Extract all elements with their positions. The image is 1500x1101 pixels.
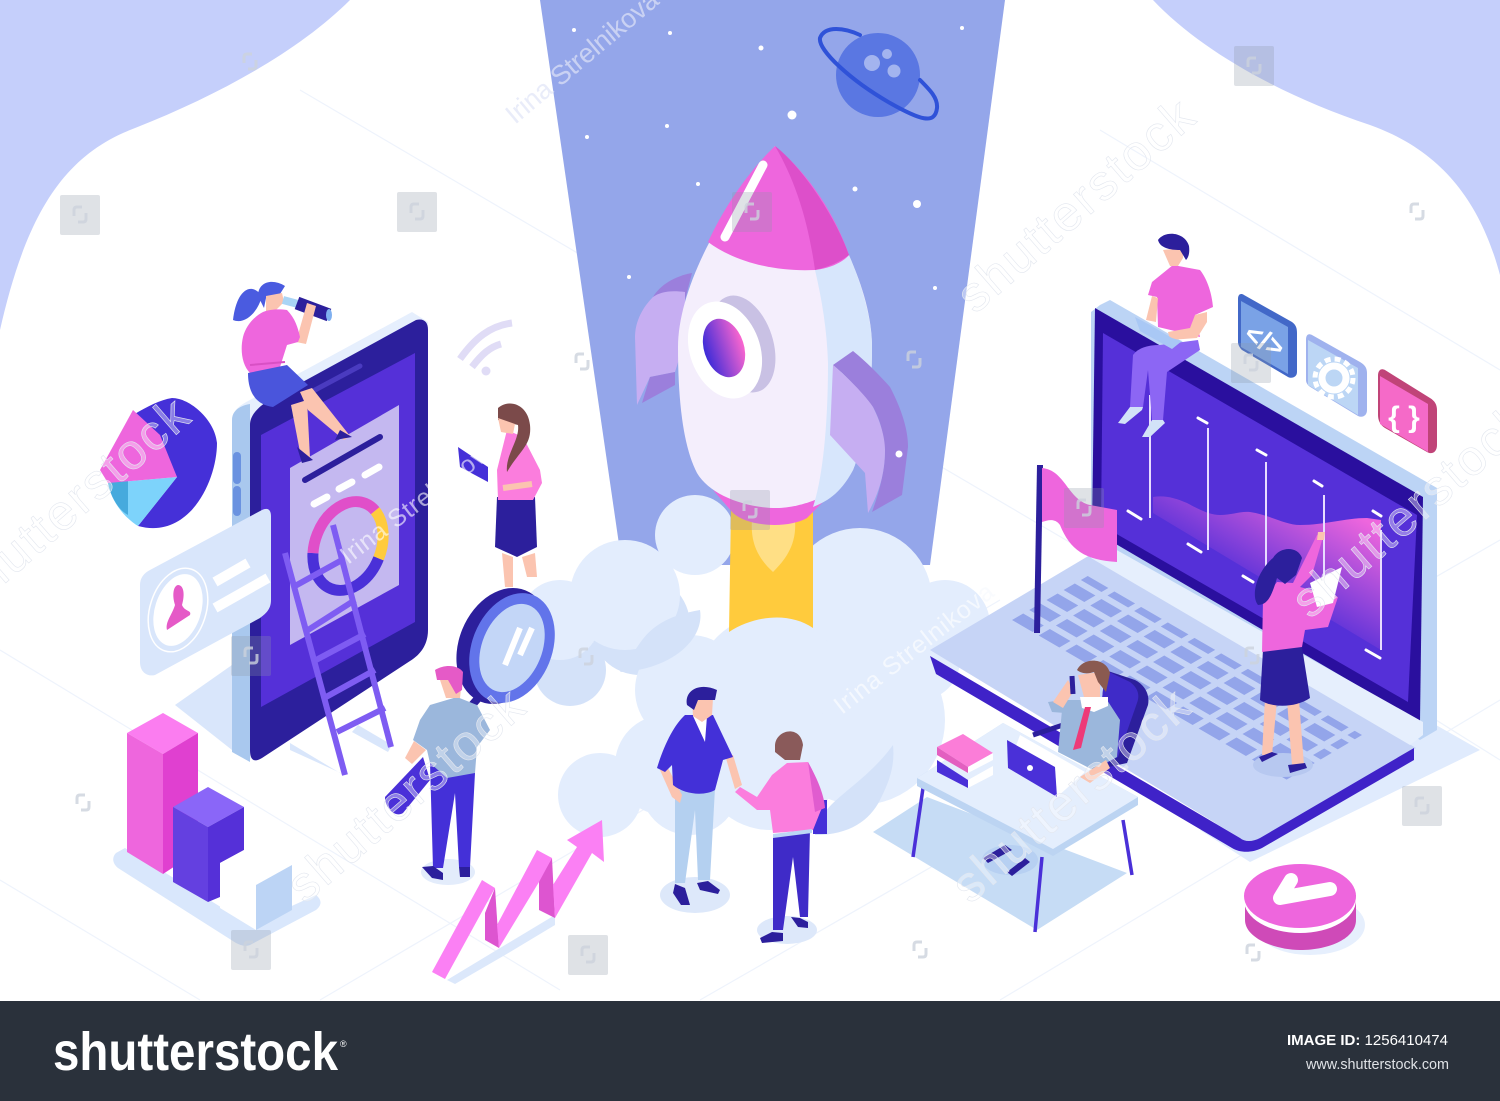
small laptop bbox=[1135, 317, 1182, 349]
pie chart bbox=[100, 398, 217, 528]
person: bearded man with folder bbox=[735, 731, 827, 944]
speaker bbox=[315, 366, 360, 390]
tile: gear bbox=[1306, 334, 1367, 417]
dashboard panel bbox=[290, 405, 399, 645]
space beam behind rocket bbox=[540, 0, 1005, 565]
skirt bbox=[248, 365, 308, 407]
phone side bbox=[232, 312, 428, 760]
registered mark: ® bbox=[340, 1039, 347, 1049]
head bbox=[1163, 248, 1183, 266]
phone shadow plate bbox=[175, 665, 232, 750]
watermark text: Irina Strelnikova bbox=[828, 578, 999, 720]
watermark corner marks bbox=[74, 54, 1428, 962]
illustration: smartphone bbox=[175, 312, 428, 775]
watermark squares bbox=[60, 46, 1442, 975]
tile: code bbox=[1238, 294, 1297, 378]
desk with man on the phone bbox=[873, 661, 1148, 932]
icon: check button bbox=[1244, 864, 1365, 955]
binoculars bbox=[283, 300, 298, 304]
illustration: rocket bbox=[635, 146, 908, 632]
watermark text: Irina Strelnikova bbox=[335, 433, 503, 570]
flag bbox=[1037, 465, 1117, 633]
logo: shutterstock: shutterstock bbox=[53, 1022, 339, 1082]
illustration: laptop bbox=[930, 300, 1480, 862]
phone body bbox=[250, 319, 428, 760]
books bbox=[937, 734, 993, 788]
trousers bbox=[430, 763, 475, 868]
chair bbox=[1095, 670, 1148, 770]
pink sweater bbox=[242, 309, 300, 373]
armrest bbox=[1033, 725, 1063, 735]
watermark text: shutterstock bbox=[945, 87, 1206, 323]
laptop base edge bbox=[930, 656, 1414, 852]
website: www.shutterstock.com bbox=[1305, 1056, 1449, 1073]
phone screen bbox=[261, 353, 415, 707]
rocket body bbox=[678, 146, 872, 508]
window bbox=[699, 287, 787, 401]
growth arrow bbox=[432, 820, 604, 984]
image id: IMAGE ID: 1256410474 bbox=[1287, 1032, 1448, 1049]
code icon tiles bbox=[1238, 294, 1437, 453]
person: man holding magnifier bbox=[385, 666, 490, 885]
tile: braces: { } bbox=[1388, 401, 1420, 434]
engine ring bbox=[713, 490, 832, 525]
footer bar bbox=[0, 1001, 1500, 1101]
chart lines bbox=[1150, 395, 1381, 650]
icon: ringed planet bbox=[820, 29, 937, 119]
watermark text: shutterstock bbox=[940, 677, 1201, 913]
profile card bbox=[138, 509, 271, 675]
shirt bbox=[413, 697, 490, 778]
legs bbox=[1130, 340, 1200, 420]
keyboard bbox=[1006, 575, 1362, 780]
laptop on desk bbox=[1008, 735, 1085, 797]
magnifying glass bbox=[440, 574, 570, 718]
flame bbox=[729, 508, 813, 632]
laptop bezel bbox=[1092, 308, 1423, 722]
man bbox=[1058, 700, 1120, 770]
area chart bbox=[1153, 496, 1381, 650]
laptop lid rim bbox=[1091, 300, 1437, 740]
desk top bbox=[917, 723, 1138, 856]
person: man in navy shirt bbox=[657, 687, 742, 913]
chart ticks bbox=[1128, 418, 1381, 658]
arm bbox=[296, 303, 316, 344]
person: woman with tablet bbox=[458, 403, 542, 587]
shirt bbox=[1148, 265, 1213, 337]
icon: wifi bbox=[460, 323, 512, 376]
person: woman with binoculars bbox=[233, 282, 352, 463]
ladder shadows bbox=[290, 743, 345, 775]
star on fin bbox=[896, 450, 902, 458]
donut chart bbox=[300, 491, 396, 601]
desk legs bbox=[913, 788, 1132, 932]
background shape: top-left corner bbox=[0, 0, 350, 330]
legs bbox=[300, 388, 350, 440]
cloud: exhaust smoke bbox=[520, 495, 990, 837]
laptop base plate bbox=[1200, 725, 1480, 862]
watermark text: shutterstock bbox=[275, 677, 536, 913]
stars bbox=[572, 26, 964, 290]
man feet under desk bbox=[982, 845, 1038, 875]
right fin bbox=[833, 351, 908, 512]
bar chart: isometric blocks bbox=[113, 713, 320, 946]
tile: code: </> bbox=[1240, 317, 1290, 364]
person: woman at screen holding clipboard bbox=[1253, 532, 1342, 777]
ponytail bbox=[233, 289, 262, 321]
folder bbox=[385, 757, 430, 814]
tile: braces bbox=[1378, 369, 1437, 453]
person: man with laptop on screen edge bbox=[1118, 234, 1213, 437]
ladder bbox=[285, 525, 391, 775]
background shape: top-right corner bbox=[1153, 0, 1500, 275]
desk shadow bbox=[873, 797, 1127, 930]
laptop deck bbox=[930, 555, 1416, 841]
laptop screen bbox=[1101, 333, 1417, 702]
arms bbox=[1146, 296, 1158, 322]
nose cone bbox=[708, 146, 849, 270]
left fin bbox=[653, 273, 692, 300]
